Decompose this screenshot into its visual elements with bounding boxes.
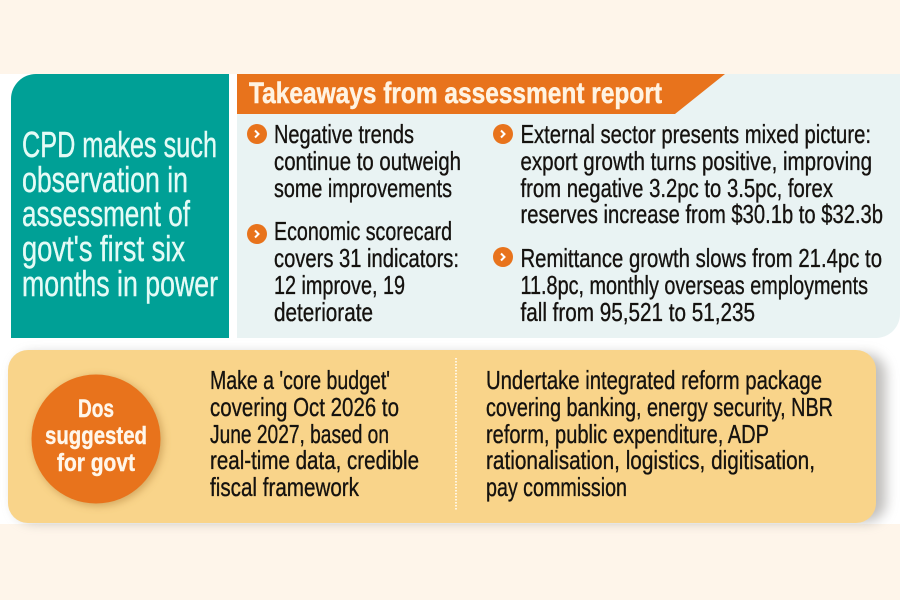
bullet: economic scorecard [247,216,459,327]
text: core budget: real-time data, credible [210,445,419,475]
panel: teal summary [11,74,229,338]
heading: CPD observation: observation in [22,159,188,200]
text: core budget [210,365,419,502]
text: core budget: June 2027, based on [210,419,389,449]
text: core budget: covering Oct 2026 to [210,392,399,422]
badge: dos suggested for govt: suggested [45,422,147,450]
text: reform package: reform, public expenditure, ADP [486,419,769,449]
text: reform package: rationalisation, logistics, digitisation, [486,445,815,475]
bullet: negative trends [247,119,461,203]
bullet: economic scorecard: Economic scorecard [274,216,452,246]
badge: dos suggested for govt: for govt [57,449,136,477]
bullet: external sector [493,119,883,229]
bullet: negative trends: some improvements [274,173,452,203]
text: core budget: Make a 'core budget' [210,365,390,395]
panel: takeaways [237,74,900,338]
badge: dos suggested for govt [32,374,163,506]
heading: CPD observation: CPD makes such [22,124,217,165]
heading: CPD observation: months in power [22,263,218,304]
bullet: remittance [493,243,882,327]
bullet: economic scorecard: covers 31 indicators: [274,243,459,273]
bullet: economic scorecard: deteriorate [274,297,373,327]
bullet: negative trends: Negative trends [274,119,414,149]
bullet: economic scorecard: 12 improve, 19 [274,270,405,300]
badge: dos suggested for govt: Dos [78,395,114,423]
banner: takeaways heading: Takeaways from assessment report [249,77,662,110]
panel: dos suggested [8,350,886,523]
heading: CPD observation: assessment of [22,193,191,234]
bullet: negative trends: continue to outweigh [274,146,461,176]
text: core budget: fiscal framework [210,472,360,502]
heading: CPD observation [22,124,218,304]
bullet: remittance: fall from 95,521 to 51,235 [520,297,755,327]
text: reform package: pay commission [486,472,627,502]
heading: CPD observation: govt's first six [22,228,185,269]
text: reform package [486,365,833,502]
